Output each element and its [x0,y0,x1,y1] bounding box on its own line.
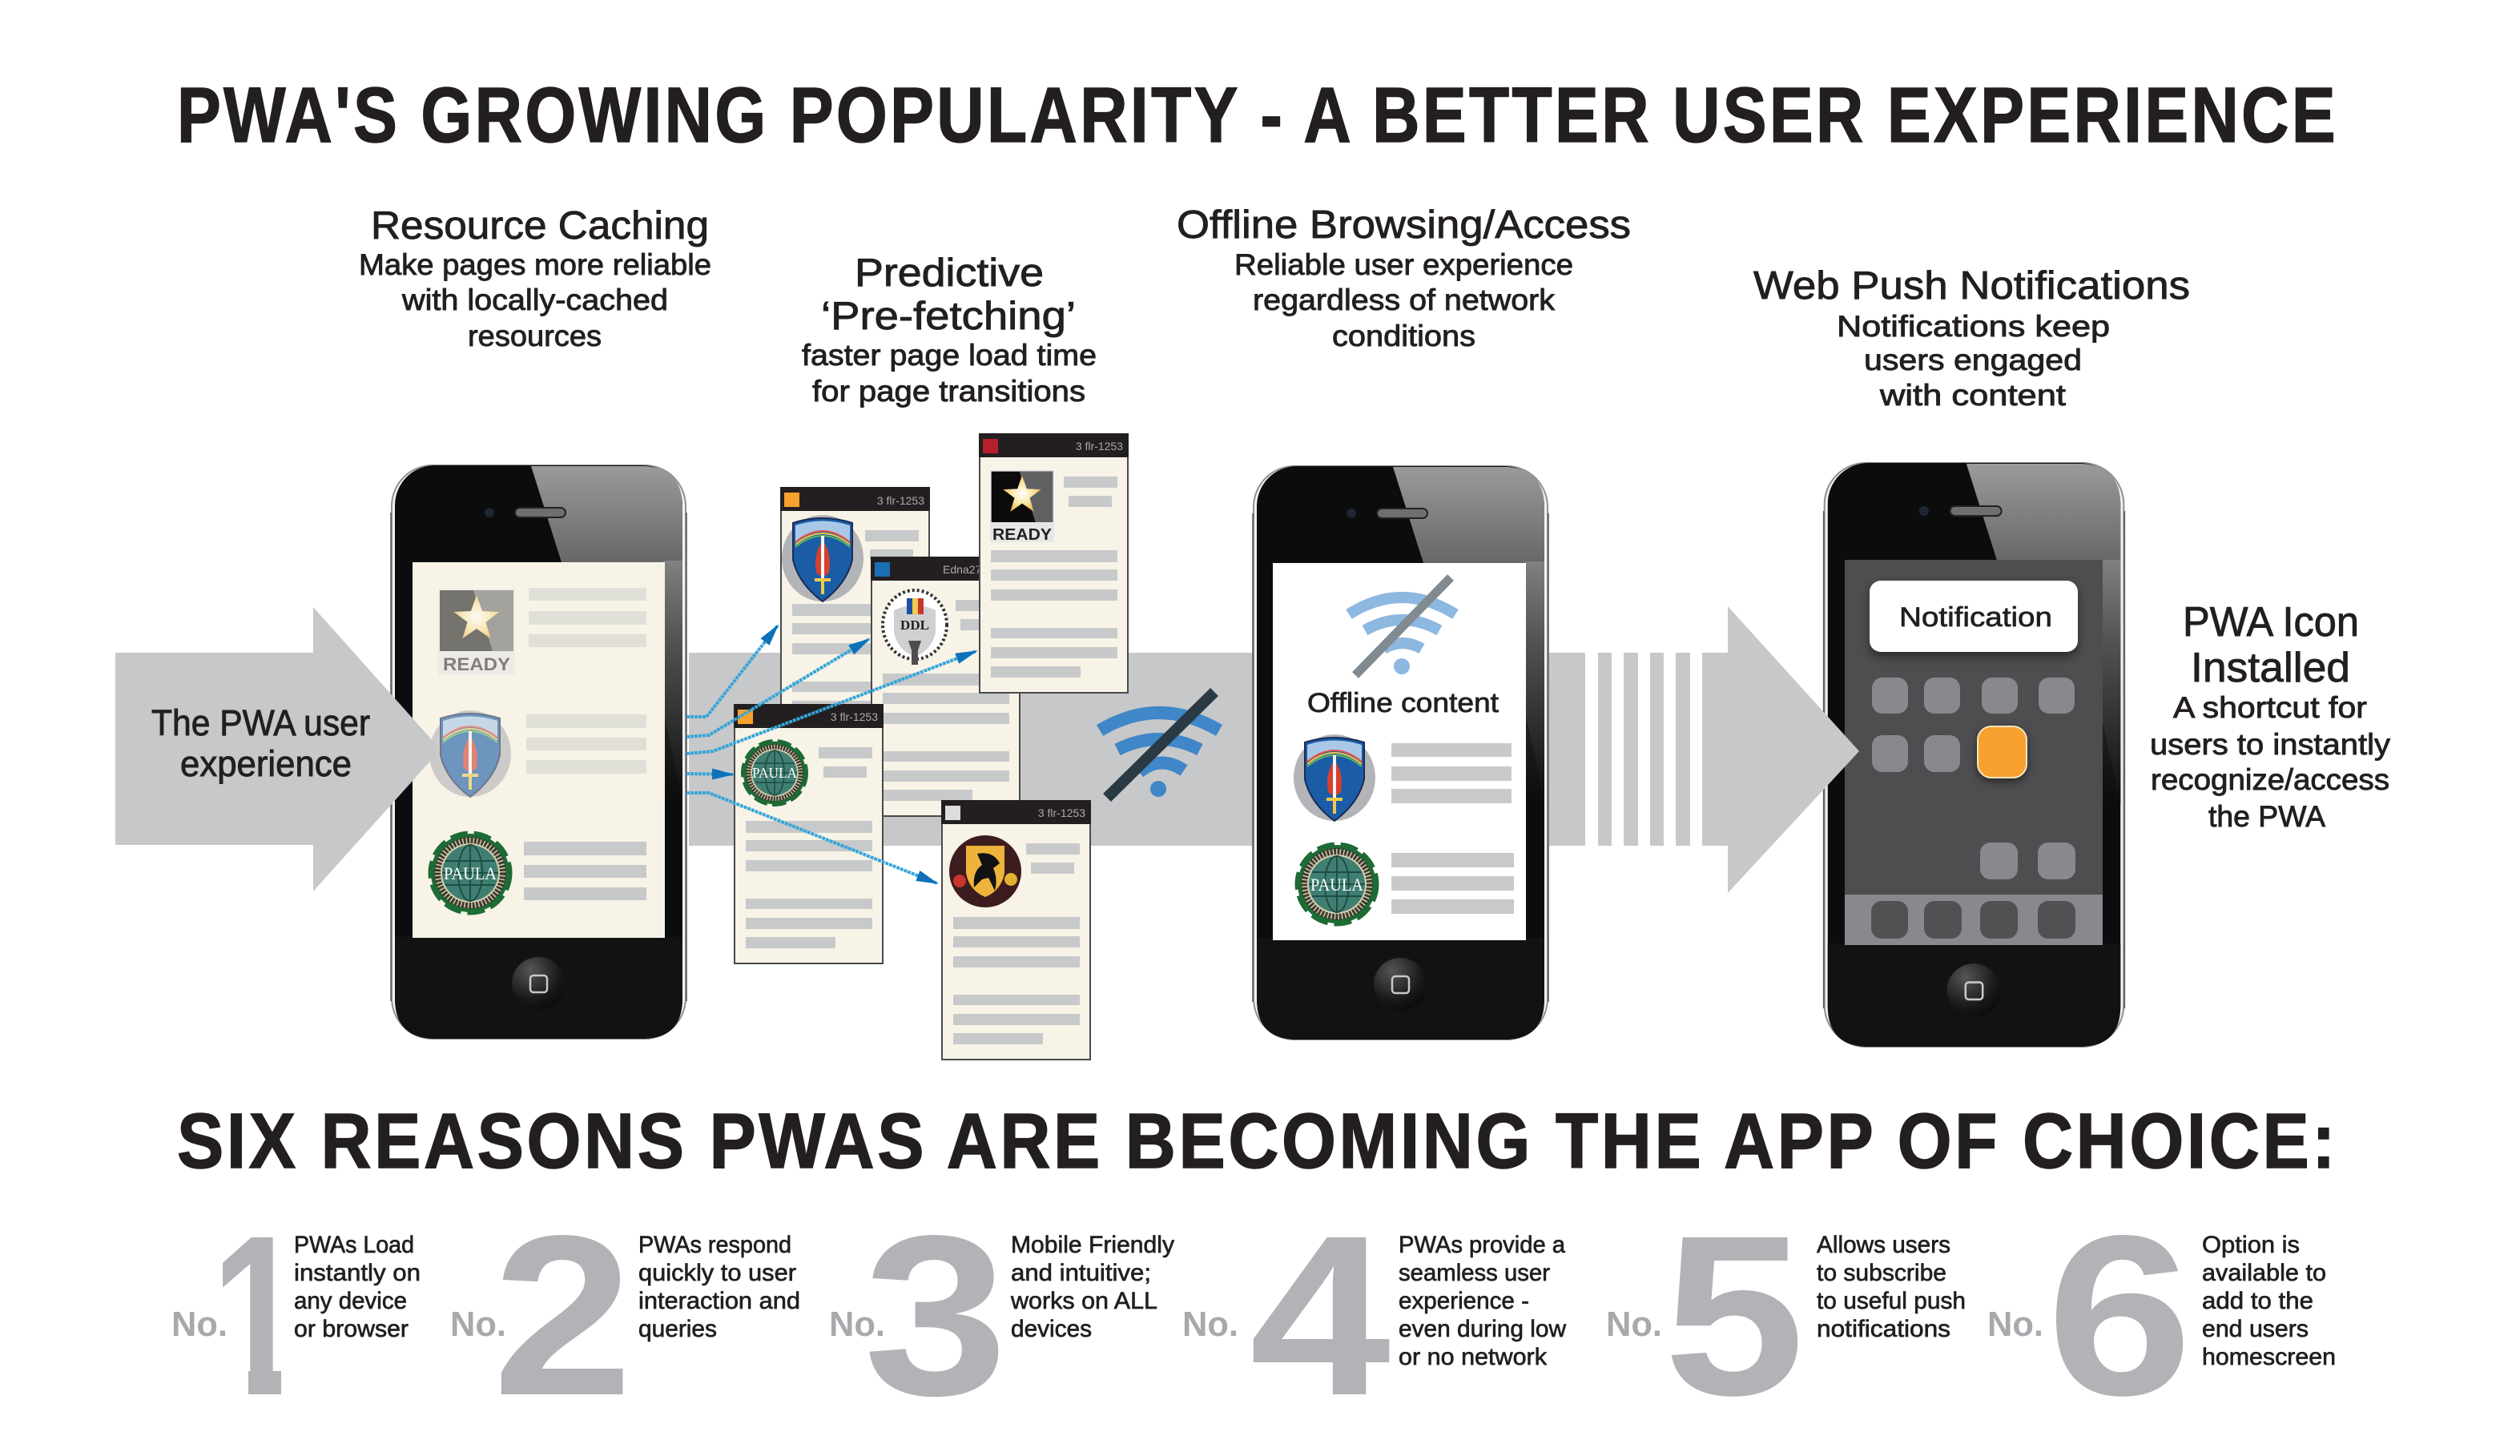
notification card [1870,581,2078,652]
reason 3: 3 [863,1189,1008,1443]
arrow: the PWA user experience: The PWA user [151,702,370,743]
dock [1845,895,2103,945]
logo: ready: READY [992,526,1053,544]
heading: predictive pre-fetching: Predictive [855,251,1044,295]
reason 4 [1182,1189,1566,1443]
reason 1: 1 [211,1189,304,1443]
reason 6: end users [2202,1316,2309,1342]
offline content label: Offline content [1307,688,1500,718]
PWA icon installed text: recognize/access [2151,763,2389,796]
heading: offline browsing: Reliable user experience [1234,248,1573,281]
reason 2: interaction and [638,1288,800,1314]
page card: grey horse: 3 flr-1253 [1038,806,1085,819]
PWA icon installed text [2150,599,2391,833]
reason 4: PWAs provide a [1399,1232,1565,1258]
striped arrow to installed icon [1549,606,1859,893]
icon: wifi off on band [1100,692,1219,798]
page card: red ready: 3 flr-1253 [1076,440,1123,452]
logo: horse crest [949,835,1021,907]
heading: offline browsing: Offline Browsing/Access [1177,203,1631,247]
grey band behind pre-fetching pages [689,653,1258,846]
section heading: SIX REASONS PWAS ARE BECOMING THE APP OF CHOICE: [177,1097,2338,1185]
reason 3: Mobile Friendly [1011,1232,1174,1258]
logo: paula: PAULA [1310,875,1363,895]
phone 1: resource caching [391,465,686,1040]
reason 3 [829,1189,1174,1443]
page card: grey horse [941,800,1091,1060]
heading: resource caching: resources [468,320,602,352]
reason 4: 4 [1250,1189,1392,1443]
heading: resource caching [359,204,711,352]
reason 6: available to [2202,1260,2326,1286]
phone 3 screen [1845,560,2103,895]
arrow: the PWA user experience: experience [180,743,352,784]
dock icons [1871,901,2075,939]
reason 3: works on ALL [1010,1288,1157,1314]
logo: paula: PAULA [444,863,497,883]
reason 4: seamless user [1399,1260,1550,1286]
reason 1: any device [294,1288,407,1314]
PWA icon installed text: users to instantly [2150,728,2391,761]
reason 4: or no network [1399,1344,1548,1370]
logo: DDL: DDL [900,617,929,633]
phone 2 screen [1273,563,1526,940]
logo: paula [430,833,510,913]
page card: orange PAULA [734,704,884,963]
reason 6 [1987,1189,2336,1443]
reason 6: homescreen [2202,1344,2336,1370]
content lines 3 [524,842,646,900]
app icons [1872,678,2075,879]
reason 4: No. [1182,1305,1238,1344]
logo: shield [429,710,511,797]
reason 1: No. [171,1305,227,1344]
page card: orange PAULA: 3 flr-1253 [831,710,878,723]
logo: paula [1297,844,1377,924]
logo: ready: READY [443,654,510,674]
reason 2: queries [638,1316,717,1342]
page card: red ready [979,433,1129,693]
logo: DDL [883,590,947,665]
content lines 2 [1391,853,1514,914]
PWA icon installed text: PWA Icon [2183,599,2359,646]
page card: orange shield: 3 flr-1253 [877,494,924,507]
reason 2: quickly to user [638,1260,796,1286]
reason 5 [1606,1189,1966,1443]
PWA icon installed text: A shortcut for [2173,691,2367,724]
heading: web push notifications: users engaged [1864,344,2082,376]
reason 3: devices [1011,1316,1092,1342]
phone 1 screen [413,562,665,938]
content lines 2 [526,714,646,774]
heading: resource caching: Resource Caching [371,204,709,247]
heading: web push notifications: Notifications keep [1837,310,2110,343]
reason 6: Option is [2202,1232,2300,1258]
heading: offline browsing [1177,203,1631,352]
heading: offline browsing: regardless of network [1253,284,1556,316]
logo: ready [438,589,515,675]
content lines 1 [529,588,646,647]
page card: blue DDL [871,557,1020,816]
heading: predictive pre-fetching: ‘Pre-fetching’ [821,295,1076,338]
reason 5: notifications [1817,1316,1950,1342]
reason 6: 6 [2047,1189,2192,1443]
reason 1: instantly on [294,1260,421,1286]
reason 5: 5 [1664,1189,1805,1443]
arrow: the PWA user experience [115,607,441,891]
logo: ready [990,470,1054,544]
page card: orange shield [780,487,930,746]
reason 3: and intuitive; [1011,1260,1151,1286]
reason 2 [450,1189,800,1443]
heading: predictive pre-fetching: for page transitions [812,375,1085,408]
reason 5: No. [1606,1305,1662,1344]
heading: web push notifications: Web Push Notifications [1753,264,2190,308]
logo: paula [743,741,807,805]
reason 2: PWAs respond [638,1232,791,1258]
heading: resource caching: with locally-cached [401,284,668,316]
heading: resource caching: Make pages more reliable [359,248,711,281]
reason 5: Allows users [1817,1232,1950,1258]
installed PWA icon [1978,726,2027,778]
reason 1: PWAs Load [294,1232,414,1258]
reason 1: or browser [294,1316,409,1342]
reason 2: 2 [493,1189,633,1443]
heading: web push notifications: with content [1879,379,2067,412]
heading: predictive pre-fetching: faster page load time [802,339,1097,372]
content lines 1 [1391,743,1512,803]
logo: paula: PAULA [752,765,797,781]
reason 4: even during low [1399,1316,1566,1342]
arrows: pre-fetch links [686,625,976,883]
phone 2: offline access [1253,465,1548,1040]
reason 2: No. [450,1305,506,1344]
reason 5: to subscribe [1817,1260,1946,1286]
heading: offline browsing: conditions [1332,320,1475,352]
reason 6: add to the [2202,1288,2313,1314]
notification card: Notification [1899,602,2052,633]
reason 6: No. [1987,1305,2043,1344]
heading: web push notifications [1753,264,2190,412]
PWA icon installed text: Installed [2191,645,2350,691]
icon: wifi off faded [1349,577,1455,675]
reason 4: experience - [1399,1288,1529,1314]
reason 5: to useful push [1817,1288,1966,1314]
page card: blue DDL: Edna27 [943,563,981,576]
reason 3: No. [829,1305,885,1344]
logo: shield [1294,734,1375,821]
PWA icon installed text: the PWA [2208,800,2325,833]
reason 1 [173,1235,420,1394]
heading: predictive pre-fetching [802,251,1097,408]
phone 3: web push [1824,462,2124,1048]
